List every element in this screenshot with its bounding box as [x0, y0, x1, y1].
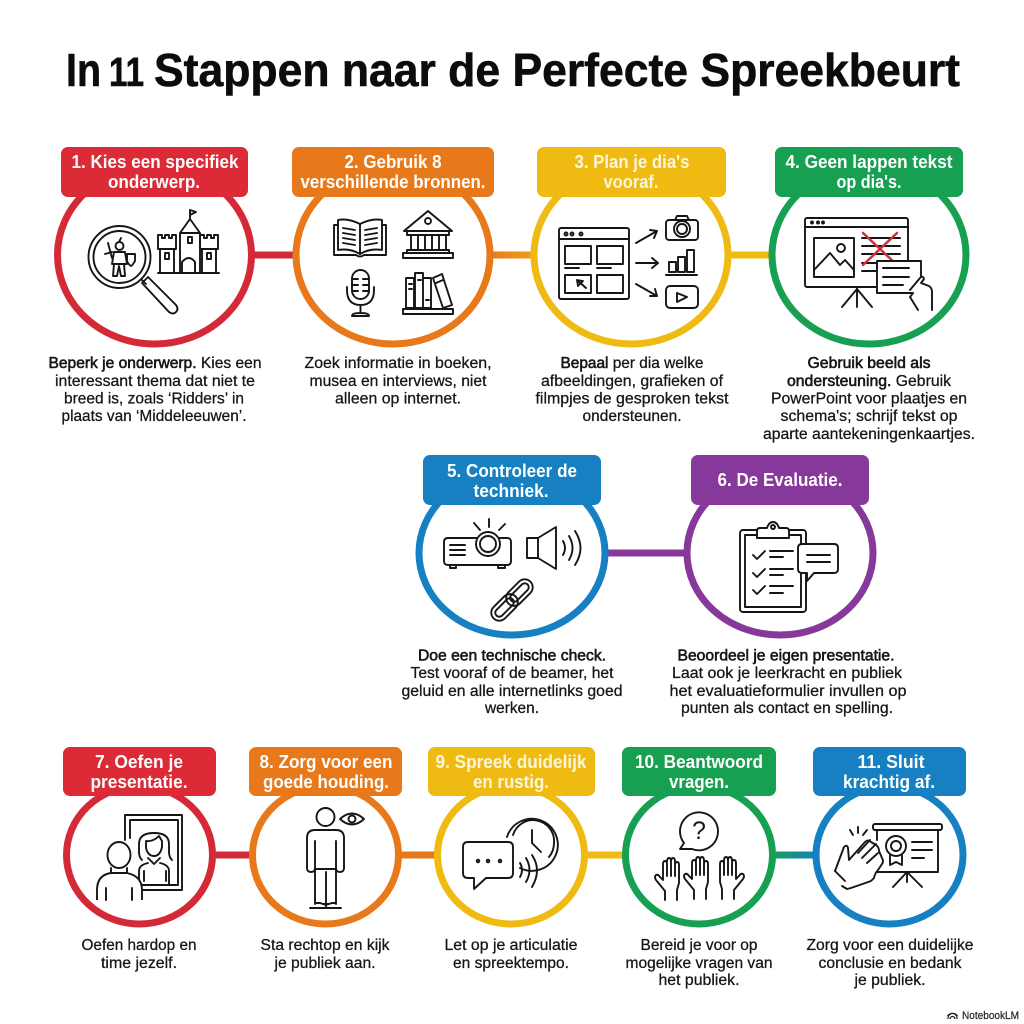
title badge: presentatie.	[90, 772, 188, 792]
title badge: 11. Sluit	[858, 752, 925, 772]
description: en spreektempo.	[453, 955, 569, 972]
ring	[772, 166, 966, 344]
ring	[816, 786, 963, 924]
icon: question bubble and raised hands	[655, 812, 744, 900]
title badge	[292, 147, 494, 197]
description: je publiek.	[854, 972, 926, 989]
description: alleen op internet.	[335, 390, 461, 408]
title badge: goede houding.	[263, 772, 389, 792]
connector: step 9 to 10	[584, 852, 626, 858]
description: breed is, zoals ‘Ridders’ in	[64, 390, 244, 408]
title badge	[423, 455, 601, 505]
description	[626, 937, 772, 989]
ring	[296, 166, 490, 344]
description: interessant thema dat niet te	[55, 373, 255, 390]
ring	[687, 471, 873, 635]
description: aparte aantekeningenkaartjes.	[763, 426, 975, 443]
description: ondersteuning. Gebruik	[787, 373, 952, 390]
description: Let op je articulatie	[444, 937, 578, 954]
description	[444, 937, 578, 972]
ring	[419, 471, 605, 635]
title badge: 5. Controleer de	[447, 461, 577, 481]
icon: slide plan with media	[559, 216, 698, 308]
description	[48, 355, 262, 425]
title badge	[691, 455, 869, 505]
icon: person in front of mirror	[97, 815, 182, 900]
connector: step 7 to 8	[212, 852, 253, 858]
ring	[66, 786, 212, 924]
title: 11	[109, 49, 144, 95]
ring	[438, 786, 584, 924]
description	[260, 937, 390, 972]
icon: speech bubble, clock and sound waves	[463, 819, 558, 889]
description	[82, 937, 196, 972]
panel: step 9	[428, 747, 595, 972]
description: Test vooraf of de beamer, het	[410, 665, 614, 682]
footer: NotebookLM logo: NotebookLM	[962, 1010, 1019, 1022]
panel: step 3	[534, 147, 729, 425]
description: PowerPoint voor plaatjes en	[771, 390, 967, 408]
description: werken.	[484, 700, 539, 717]
panel: step 11	[806, 747, 974, 989]
title badge	[61, 147, 248, 197]
title badge	[428, 747, 595, 796]
title badge: vragen.	[669, 772, 729, 792]
icon: clapping hands and presentation board with rosette	[835, 824, 942, 889]
description	[402, 648, 622, 717]
ring	[626, 786, 772, 924]
icon: standing person with eye	[307, 808, 364, 908]
description: het evaluatieformulier invullen op	[670, 683, 907, 700]
panel: step 4	[763, 147, 975, 443]
panel: step 8	[249, 747, 402, 972]
description: conclusie en bedank	[818, 955, 962, 972]
title badge: 8. Zorg voor een	[260, 752, 392, 772]
connector: step 2 to 3	[488, 252, 536, 258]
title badge: onderwerp.	[108, 172, 200, 192]
panel: step 10	[622, 747, 776, 989]
title badge: 3. Plan je dia's	[574, 152, 690, 172]
title badge	[537, 147, 726, 197]
title badge: 4. Geen lappen tekst	[786, 152, 953, 172]
description	[806, 937, 974, 989]
title badge: en rustig.	[473, 772, 549, 792]
icon: magnifier with knight and castle	[88, 210, 219, 314]
title: In	[66, 44, 101, 96]
description: Sta rechtop en kijk	[260, 937, 390, 954]
connector: step 3 to 4	[726, 252, 774, 258]
title badge: 6. De Evaluatie.	[718, 470, 842, 490]
panel: step 1	[48, 147, 262, 425]
description: geluid en alle internetlinks goed	[402, 683, 622, 700]
description: Bepaal per dia welke	[560, 355, 704, 372]
icon: book, museum, microphone, bookshelf	[334, 211, 453, 316]
description: Zoek informatie in boeken,	[304, 355, 492, 372]
description	[763, 355, 975, 443]
connector: step 8 to 9	[398, 852, 438, 858]
ring	[252, 786, 398, 924]
description: het publiek.	[658, 972, 740, 989]
title badge	[813, 747, 966, 796]
description	[536, 355, 729, 425]
panel: step 5	[402, 455, 622, 717]
title badge: 7. Oefen je	[95, 752, 183, 772]
connector: step 1 to 2	[250, 252, 298, 258]
description: musea en interviews, niet	[310, 373, 487, 390]
ring	[534, 166, 728, 344]
title: Stappen naar de Perfecte Spreekbeurt	[154, 44, 960, 96]
description	[670, 648, 907, 717]
description: Doe een technische check.	[418, 648, 606, 665]
title badge: 2. Gebruik 8	[344, 152, 442, 172]
description: punten als contact en spelling.	[681, 700, 893, 717]
description: Oefen hardop en	[82, 937, 196, 954]
panel: step 2	[292, 147, 494, 408]
title badge: op dia's.	[836, 172, 902, 192]
description: schema's; schrijf tekst op	[780, 408, 958, 425]
description: Gebruik beeld als	[808, 355, 930, 372]
title badge	[775, 147, 963, 197]
title badge: verschillende bronnen.	[300, 172, 486, 192]
title badge: 10. Beantwoord	[635, 752, 763, 772]
title badge: vooraf.	[604, 172, 658, 192]
description: time jezelf.	[101, 955, 177, 972]
title badge	[622, 747, 776, 796]
panel: step 6	[670, 455, 907, 717]
title badge	[63, 747, 216, 796]
connector: step 10 to 11	[772, 852, 817, 858]
panel: step 7	[63, 747, 216, 972]
description: afbeeldingen, grafieken of	[541, 373, 724, 390]
description: plaats van ‘Middeleeuwen’.	[62, 408, 246, 425]
title badge	[249, 747, 402, 796]
icon: projector, speaker, chain link	[444, 519, 580, 624]
description	[304, 355, 492, 408]
description: Laat ook je leerkracht en publiek	[672, 665, 903, 682]
icon: clipboard checklist with speech bubble	[740, 522, 838, 612]
description: Beperk je onderwerp. Kies een	[48, 355, 262, 372]
description: je publiek aan.	[274, 955, 376, 972]
description: mogelijke vragen van	[626, 955, 772, 972]
description: Beoordeel je eigen presentatie.	[678, 648, 894, 665]
title badge: techniek.	[474, 481, 548, 501]
description: Zorg voor een duidelijke	[806, 937, 974, 954]
description: ondersteunen.	[582, 408, 682, 425]
icon: presentation screen with crossed-out text and note card	[805, 218, 932, 310]
title badge: krachtig af.	[843, 772, 935, 792]
description: filmpjes de gesproken tekst	[536, 390, 729, 408]
connector: step 5 to 6	[604, 550, 689, 556]
title badge: 9. Spreek duidelijk	[436, 752, 587, 772]
title badge: 1. Kies een specifiek	[72, 152, 239, 172]
icon: question bubble and raised hands: ?	[692, 817, 706, 845]
ring	[58, 166, 252, 344]
description: Bereid je voor op	[640, 937, 758, 954]
